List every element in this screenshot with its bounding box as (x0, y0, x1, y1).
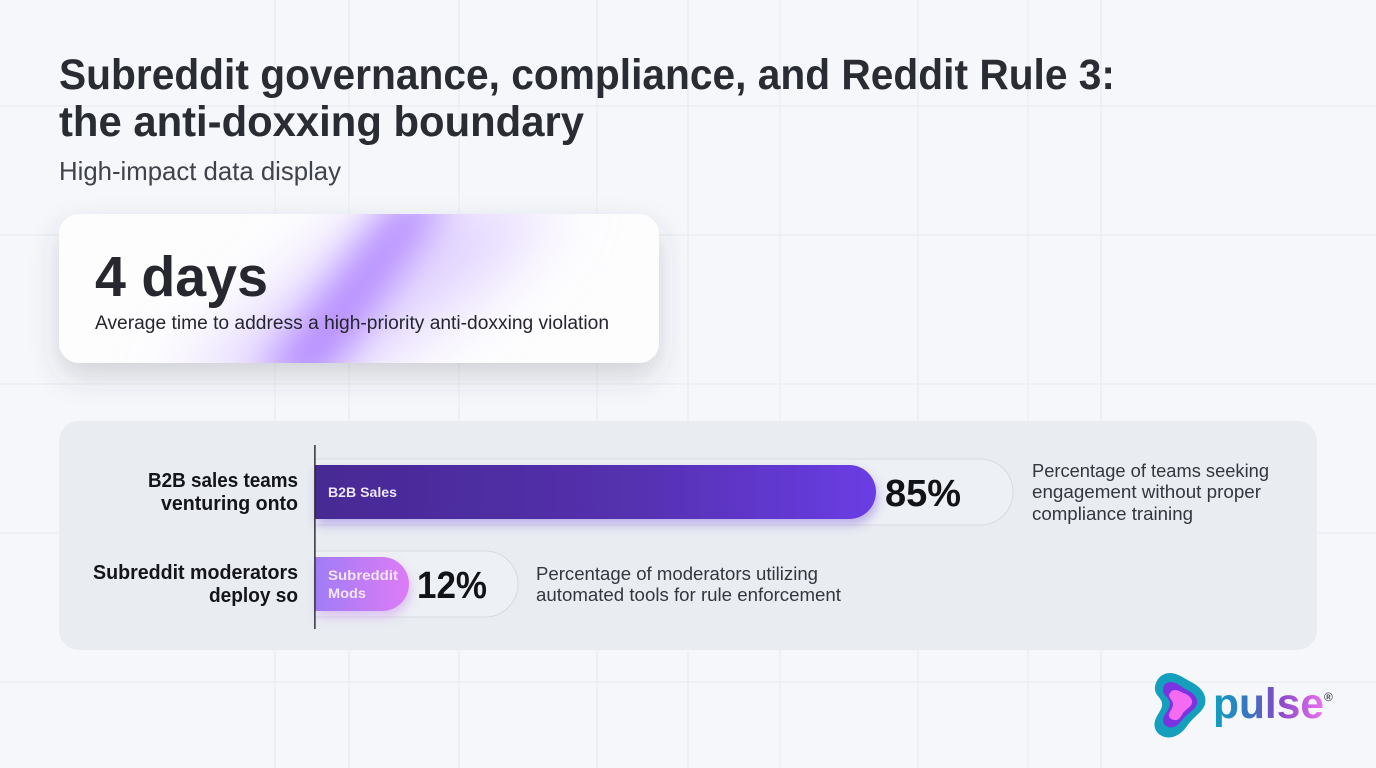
row label (93, 562, 298, 607)
description (536, 563, 841, 605)
icon: pulse blob (1154, 673, 1205, 738)
value: 12% (417, 565, 487, 607)
row label: B2B sales teams (148, 470, 298, 492)
row label (148, 470, 298, 515)
description (1032, 460, 1269, 524)
panel: bar chart (59, 421, 1317, 650)
row label: deploy so (209, 585, 298, 607)
value: 85% (885, 473, 961, 515)
title (59, 51, 1115, 146)
title: the anti-doxxing boundary (59, 98, 584, 146)
stat caption: Average time to address a high-priority anti-doxxing violation (95, 313, 609, 334)
row label: venturing onto (161, 493, 298, 515)
subtitle: High-impact data display (59, 156, 341, 186)
row: B2B sales (148, 459, 1269, 525)
description: Percentage of moderators utilizing (536, 563, 818, 584)
bar track (315, 459, 1013, 525)
wordmark: pulse (1213, 680, 1324, 728)
purple gradient streak (184, 214, 554, 363)
description: automated tools for rule enforcement (536, 584, 841, 605)
bar fill (315, 465, 876, 519)
bar label: Mods (328, 585, 366, 601)
bar label: B2B Sales (328, 484, 397, 500)
description: Percentage of teams seeking (1032, 460, 1269, 481)
bar fill (315, 557, 409, 611)
description: compliance training (1032, 503, 1193, 524)
logo: pulse (1154, 673, 1333, 738)
title: Subreddit governance, compliance, and Reddit Rule 3: (59, 51, 1115, 99)
stat value: 4 days (95, 245, 268, 309)
row label: Subreddit moderators (93, 562, 298, 584)
bar label: Subreddit (328, 567, 398, 583)
row: Subreddit moderators (93, 551, 841, 617)
registered mark: ® (1324, 690, 1333, 704)
axis line (314, 445, 316, 629)
panel: key stat card (59, 195, 659, 390)
description: engagement without proper (1032, 481, 1261, 502)
bar label (328, 567, 398, 601)
bar track (315, 551, 518, 617)
